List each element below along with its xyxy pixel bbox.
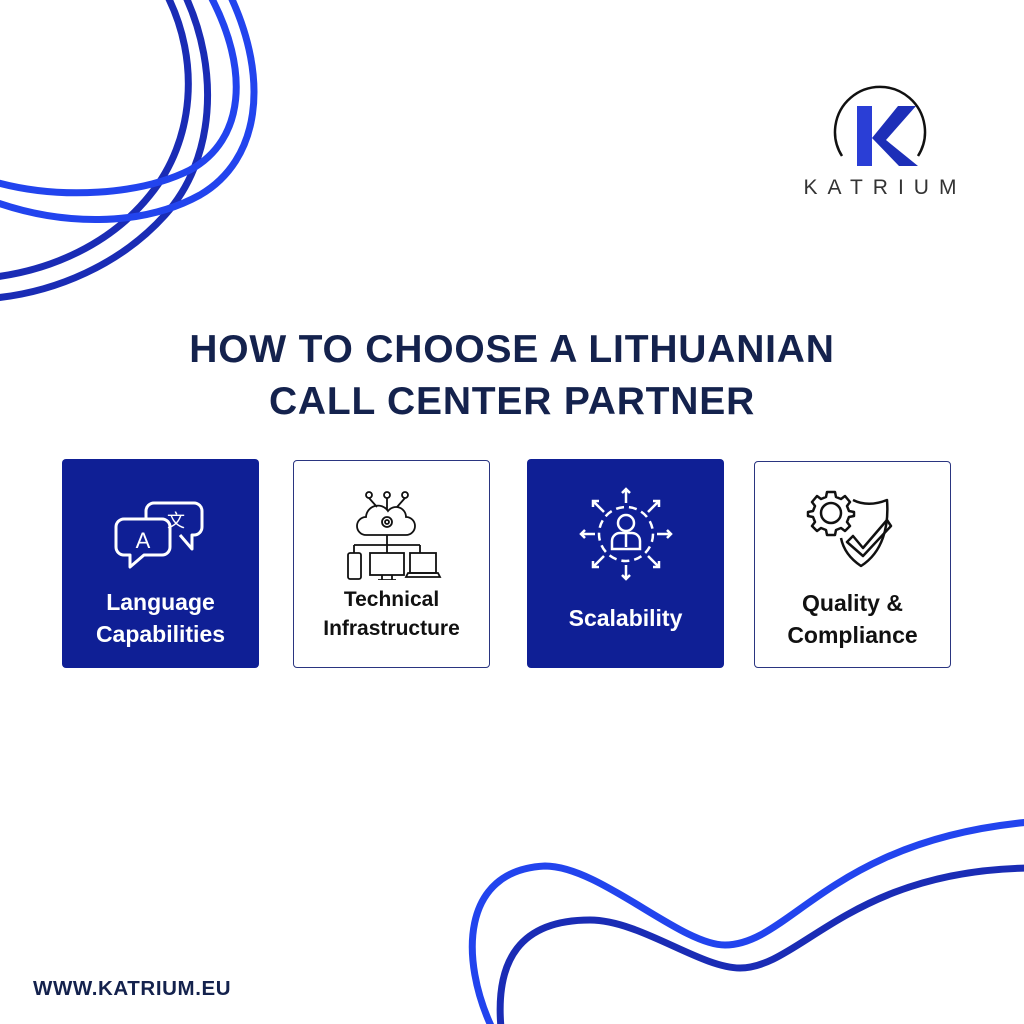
icon: person with arrows [579, 487, 673, 581]
card: technical infrastructure: Technical [344, 588, 439, 611]
footer url: WWW.KATRIUM.EU [33, 977, 231, 1000]
card: language capabilities: Capabilities [96, 621, 225, 647]
card: quality & compliance: Compliance [787, 622, 918, 648]
card: technical infrastructure [293, 460, 490, 668]
title: CALL CENTER PARTNER [269, 380, 755, 423]
title: HOW TO CHOOSE A LITHUANIAN [189, 328, 835, 371]
icon: speech bubbles [114, 502, 204, 569]
card: language capabilities [62, 459, 259, 668]
icon: speech bubbles: A [136, 528, 151, 553]
logo: KATRIUM [804, 176, 966, 199]
card: quality & compliance [754, 461, 951, 668]
card: technical infrastructure: Infrastructure [323, 617, 460, 640]
card: scalability [527, 459, 724, 668]
icon: speech bubbles: 文 [167, 507, 185, 533]
logo [804, 86, 966, 199]
card: scalability: Scalability [569, 605, 682, 631]
icon: cloud network [347, 491, 442, 580]
card: language capabilities: Language [106, 589, 215, 615]
title [189, 328, 835, 423]
card: quality & compliance: Quality & [802, 590, 903, 616]
icon: gear and shield check [806, 490, 892, 568]
